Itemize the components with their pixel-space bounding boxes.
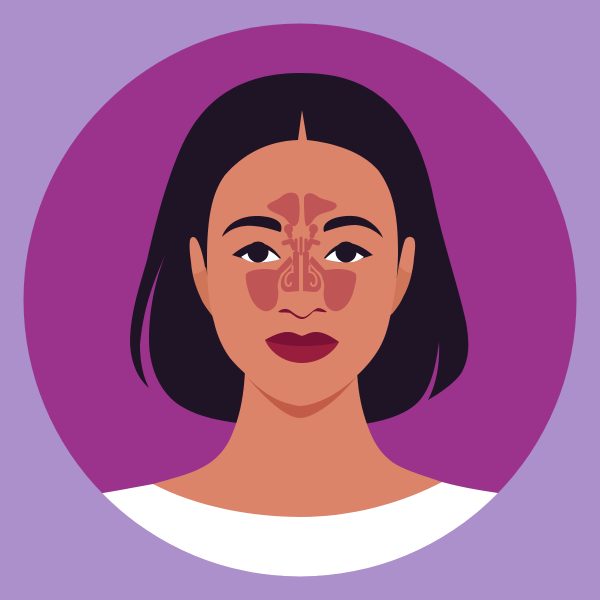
sinuses <box>246 193 356 311</box>
left eyebrow <box>222 216 281 237</box>
ethmoid blobs <box>284 224 318 234</box>
nasal curl right <box>303 252 321 292</box>
ethmoid and prongs <box>284 229 318 256</box>
frontal sinus left <box>267 193 300 226</box>
neck <box>107 373 493 517</box>
right ear <box>390 237 415 316</box>
chin shadow <box>247 377 356 418</box>
right eye <box>324 242 373 262</box>
left eye <box>232 242 281 262</box>
frontal sinus right <box>304 193 337 226</box>
maxillary sinus right <box>309 256 356 311</box>
left ear <box>190 237 214 318</box>
right eyebrow <box>323 216 383 238</box>
curl openings <box>285 266 317 286</box>
shirt <box>102 482 498 576</box>
lips <box>265 332 339 363</box>
hair <box>130 73 468 424</box>
maxillary sinus left <box>246 256 293 311</box>
nose <box>278 308 327 319</box>
nasal curl left <box>281 252 299 292</box>
face <box>207 110 398 406</box>
